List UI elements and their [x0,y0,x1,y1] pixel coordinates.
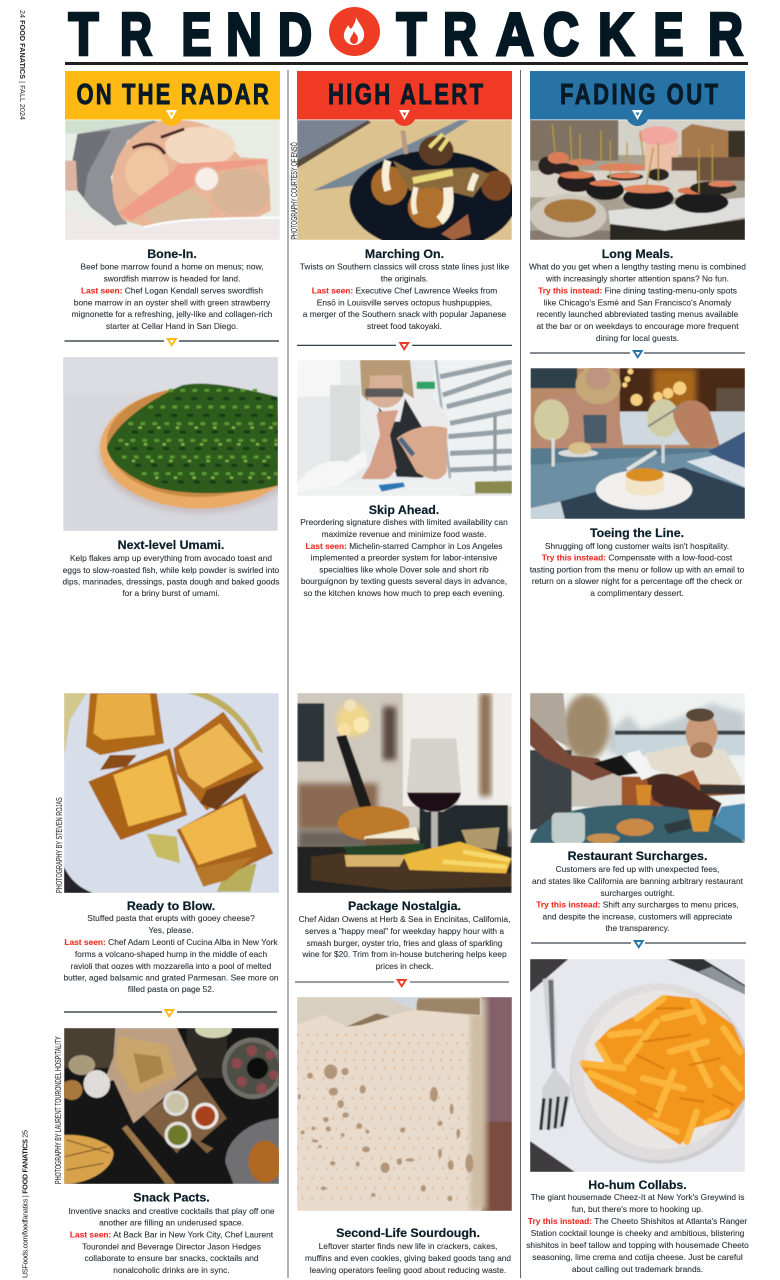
story: Bone-In: Beef bone marrow found a home on menus; now, [81,262,263,272]
story: Ho-hum Collabs [526,1178,749,1274]
photo: cheese puffs on plate [530,959,745,1172]
story: Marching On: the originals. [381,274,428,284]
title rule [65,62,748,65]
story: Long Meals: Try this instead: Fine dining tasting-menu-only spots [538,285,737,295]
story: Ho-hum Collabs: seasoning, lime crema and cotija cheese. Just be careful [532,1252,743,1262]
story: Marching On [300,247,510,331]
story: Bone-In: swordfish marrow is headed for land. [104,274,240,284]
story: Long Meals: with increasingly shorter attention spans? No fun. [545,274,729,284]
photo credit: Laurent Tourondel: PHOTOGRAPHY BY LAURENT TOURONDEL HOSPITALITY [55,1036,63,1184]
title: N [226,1,262,68]
story: Ho-hum Collabs: fun, but there's more to hooking up. [572,1204,703,1214]
column divider right [520,70,521,1278]
banner: on the radar [65,71,280,126]
story: Skip Ahead: maximize revenue and minimize food waste. [322,529,486,539]
story: Restaurant Surcharges: surcharges outright. [600,888,675,898]
story: Snack Pacts: Last seen: At Back Bar in New York City, Chef Laurent [70,1229,274,1239]
column divider left [288,70,289,1278]
story: Marching On: Marching On. [365,247,444,261]
photo: stuffed ravioli [64,693,279,893]
story: Ready to Blow: filled pasta on page 52. [128,984,214,994]
story: Ho-hum Collabs: shishitos in beef tallow and topping with housemade Cheeto [526,1240,749,1250]
story: Long Meals: recently launched abbreviated tasting menus available [537,309,739,319]
story: Restaurant Surcharges [532,849,744,933]
story: Skip Ahead: Last seen: Michelin-starred Camphor in Los Angeles [306,541,502,551]
story: Ho-hum Collabs: Try this instead: The Cheeto Shishitos at Atlanta's Ranger [528,1216,747,1226]
story: Second-Life Sourdough [305,1226,511,1275]
banner: high alert: HIGH ALERT [328,79,483,111]
story: Package Nostalgia: smash burger, oyster trio, fries and glass of sparkling [307,938,503,948]
story: Bone-In: Last seen: Chef Logan Kendall serves swordfish [81,285,263,295]
story: Skip Ahead: Preordering signature dishes with limited availability can [300,517,508,527]
story: Snack Pacts: collaborate to ensure bar snacks, cocktails and [84,1253,259,1263]
story: Restaurant Surcharges: Try this instead: Shift any surcharges to menu prices, [536,900,739,910]
divider with marker [64,338,279,347]
story: Marching On: Twists on Southern classics will cross state lines just like [300,262,510,272]
story: Second-Life Sourdough: leaving operators feeling good about reducing waste. [310,1265,506,1275]
story: Next-level Umami [63,538,280,598]
story: Long Meals: like Chicago's Esmé and San Francisco's Anomaly [544,297,732,307]
icon: marker [166,110,177,120]
divider with marker [295,979,509,988]
divider with marker [64,1009,277,1018]
story: Restaurant Surcharges: Customers are fed up with unexpected fees, [556,864,719,874]
banner: high alert [297,71,512,126]
story: Package Nostalgia: serves a "happy meal" for weekday happy hour with a [305,926,504,936]
icon: marker [632,110,643,120]
story: Package Nostalgia: Chef Aidan Owens at Herb & Sea in Encinitas, California, [299,914,510,924]
divider with marker [297,342,512,351]
story: Skip Ahead: bourguignon by texting guests several days in advance, [301,576,507,586]
banner: on the radar: ON THE RADAR [76,79,269,111]
photo: chef using phone [297,360,512,496]
story: Marching On: Last seen: Executive Chef Lawrence Weeks from [312,285,497,295]
title: T [68,1,98,68]
story: Marching On: Ensō in Louisville serves octopus hushpuppies, [317,297,492,307]
photo: sourdough crumb [297,997,512,1211]
story: Toeing the Line: Try this instead: Compensate with a low-food-cost [542,552,733,562]
title [68,1,743,68]
story: Next-level Umami: Next-level Umami. [118,538,224,552]
story: Skip Ahead [300,503,508,598]
story: Toeing the Line: a complimentary dessert. [590,588,684,598]
title: T [396,1,426,68]
story: Package Nostalgia: Package Nostalgia. [348,899,461,913]
title: E [654,1,684,68]
story: Ho-hum Collabs: about calling out trademark brands. [572,1264,703,1274]
story: Ready to Blow: Stuffed pasta that erupts with gooey cheese? [87,913,255,923]
story: Next-level Umami: for a briny burst of umami. [122,588,220,598]
story: Package Nostalgia: wine for $20. Trim from in-house butchering helps keep [301,949,507,959]
story: Ready to Blow: ravioli that oozes with mozzarella into a pool of melted [71,961,272,971]
story: Toeing the Line: Toeing the Line. [590,526,684,540]
story: Ho-hum Collabs: The giant housemade Cheez-It at New York's Greywind is [531,1192,744,1202]
story: Skip Ahead: Skip Ahead. [369,503,439,517]
story: Long Meals: Long Meals. [602,247,673,261]
title: R [120,1,152,68]
story: Skip Ahead: specialties like whole Dover sole and short rib [319,564,489,574]
story: Ready to Blow: forms a volcano-shaped hump in the middle of each [75,949,267,959]
photo credit: Steven Rojas: PHOTOGRAPHY BY STEVEN ROJAS [56,797,64,893]
story: Ready to Blow: butter, aged balsamic and grated Parmesan. See more on [63,972,279,982]
story: Marching On: a merger of the Southern snack with popular Japanese [303,309,507,319]
story: Skip Ahead: implemented a preorder system for labor-intensive [311,552,498,562]
story: Snack Pacts: Snack Pacts. [133,1190,210,1204]
story: Restaurant Surcharges: the transparency. [605,923,670,933]
story: Skip Ahead: so the kitchen knows how much to prep each evening. [303,588,505,598]
photo: swordfish bone-in [65,120,280,240]
story: Toeing the Line [530,526,745,598]
divider with marker [531,940,746,949]
story: Snack Pacts: Inventive snacks and creative cocktails that play off one [68,1206,275,1216]
photo: dessert on table [530,368,745,519]
story: Package Nostalgia [299,899,510,971]
story: Bone-In: Bone-In. [147,247,197,261]
story: Package Nostalgia: prices in check. [376,961,433,971]
title: A [496,1,534,68]
story: Bone-In: bone marrow in an oyster shell with green strawberry [74,297,271,307]
banner: fading out [530,71,745,126]
story: Toeing the Line: Shrugging off long customer waits isn't hospitality. [545,541,729,551]
photo: paying with card [530,693,745,843]
page folio top: 24 FOOD FANATICS | FALL 2024 [18,10,27,120]
title: E [182,1,212,68]
story: Restaurant Surcharges: Restaurant Surcharges. [568,849,707,863]
title: R [708,1,743,68]
story: Next-level Umami: eggs to slow-roasted fish, while kelp powder is swirled into [63,565,280,575]
photo: burger and wine [297,693,512,893]
story: Bone-In: starter at Cellar Hand in San Diego. [106,321,238,331]
story: Second-Life Sourdough: Second-Life Sourdough. [336,1226,480,1240]
story: Bone-In: mignonette for a refreshing, jelly-like and collagen-rich [72,309,273,319]
photo: snack spread overhead [64,1028,279,1184]
story: Toeing the Line: return on a slower night for a percentage off the check or [532,576,742,586]
page folio bottom: USFoods.com/foodfanatics | FOOD FANATICS 25 [20,1130,30,1278]
story: Long Meals: What do you get when a lengthy tasting menu is combined [529,262,746,272]
divider with marker [530,350,745,359]
story: Second-Life Sourdough: muffins and even cookies, giving baked goods tang and [305,1253,511,1263]
story: Marching On: street food takoyaki. [367,321,442,331]
title: R [443,1,477,68]
photo: takoyaki octopus hushpuppies [297,120,512,240]
photo credit: Enso: PHOTOGRAPHY COURTESY OF ENSŌ [290,142,299,240]
story: Second-Life Sourdough: Leftover starter finds new life in crackers, cakes, [319,1241,497,1251]
title: K [598,1,634,68]
story: Snack Pacts: nonalcoholic drinks are in sync. [113,1265,230,1275]
story: Next-level Umami: Kelp flakes amp up everything from avocado toast and [70,553,272,563]
title: C [543,1,579,68]
story: Ready to Blow [63,899,279,994]
story: Toeing the Line: tasting portion from the menu or follow up with an email to [530,564,745,574]
story: Long Meals: at the bar or on weekdays to encourage more frequent [536,321,739,331]
story: Ready to Blow: Ready to Blow. [127,899,215,913]
story: Restaurant Surcharges: and despite the increase, customers will appreciate [543,912,733,922]
story: Ready to Blow: Yes, please. [148,925,194,935]
photo: kelp flakes in bowl [63,357,278,531]
story: Long Meals: dining for local guests. [596,333,679,343]
story: Snack Pacts: another are filling an underused space. [99,1218,244,1228]
photo: small plated tasting bowls [530,120,745,240]
story: Ho-hum Collabs: Ho-hum Collabs. [588,1178,687,1192]
story: Restaurant Surcharges: and states like California are banning arbitrary restaurant [532,876,744,886]
story: Snack Pacts [68,1190,275,1275]
story: Ho-hum Collabs: Station cocktail lounge is cheeky and ambitious, blistering [531,1228,745,1238]
story: Snack Pacts: Tourondel and Beverage Director Jason Hedges [82,1241,261,1251]
title: D [278,1,312,68]
banner: fading out: FADING OUT [560,79,718,111]
icon: marker [399,110,410,120]
story: Long Meals [529,247,746,343]
story: Bone-In [72,247,273,331]
story: Ready to Blow: Last seen: Chef Adam Leonti of Cucina Alba in New York [64,937,278,947]
story: Next-level Umami: dips, marinades, dressings, pasta dough and baked goods [63,576,279,586]
icon: flame in red circle [329,7,380,56]
